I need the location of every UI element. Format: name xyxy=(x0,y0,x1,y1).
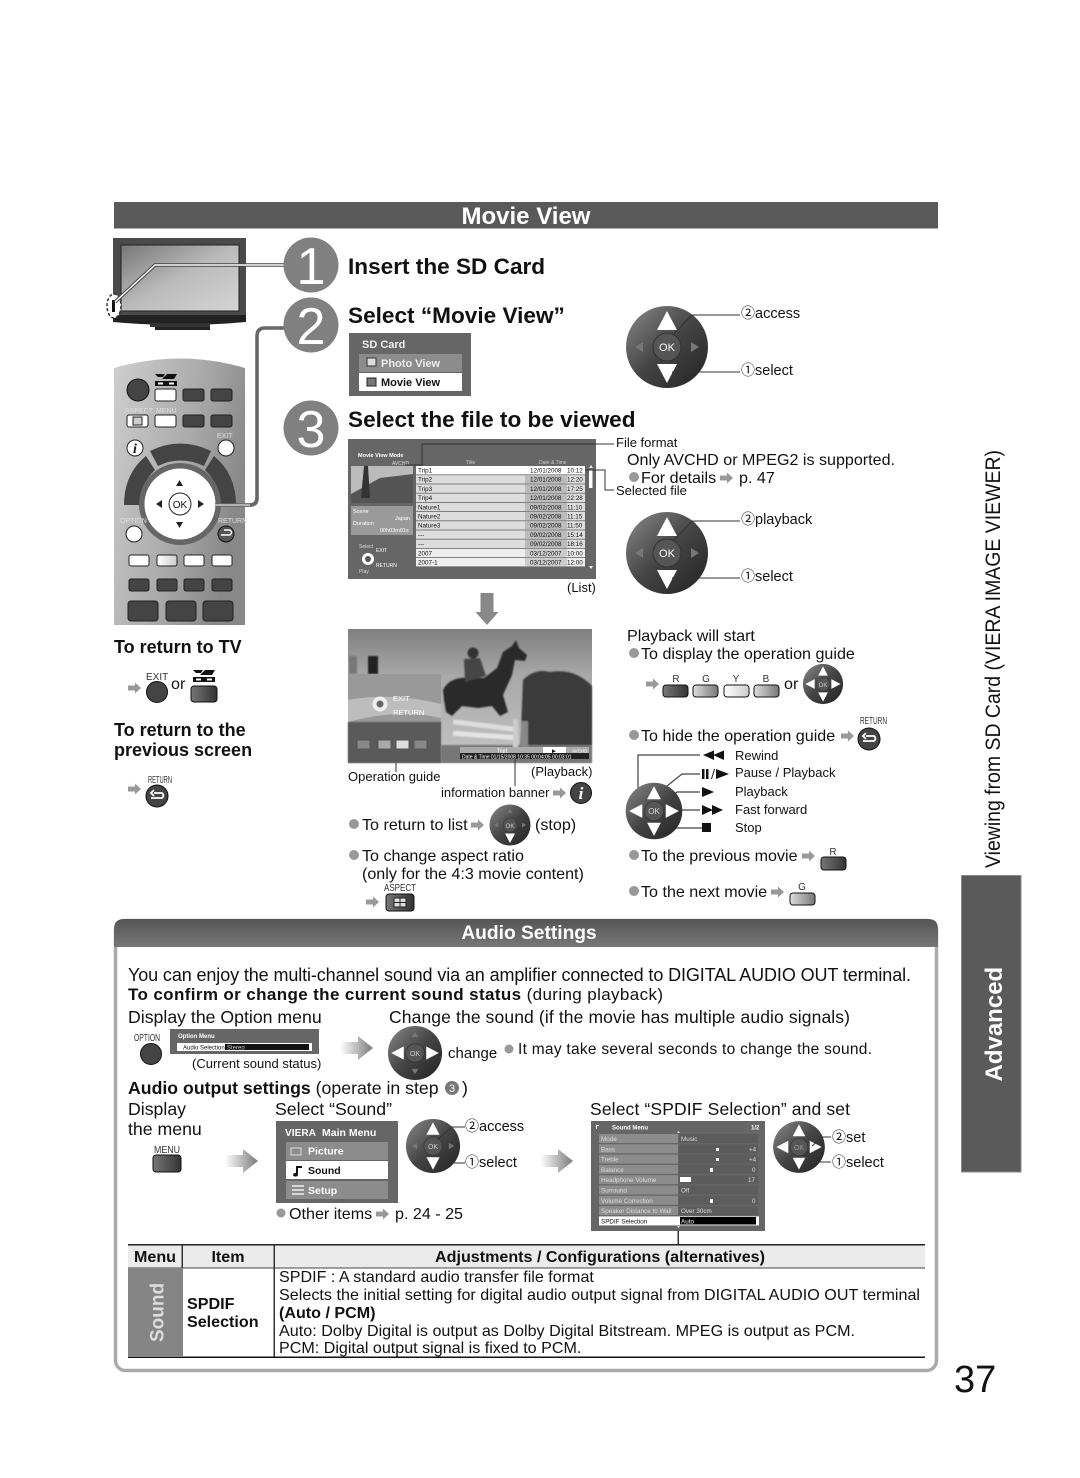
nav pad: access and select xyxy=(406,1118,524,1173)
playback control legend: OK xyxy=(648,807,660,816)
settings table xyxy=(128,1244,925,1358)
text: playback will start: Playback will start xyxy=(627,627,755,645)
option menu screen: Option Menu xyxy=(178,1034,215,1040)
table header: Item xyxy=(211,1248,245,1266)
table header xyxy=(128,1244,925,1357)
instruction: aspect ratio: ASPECT xyxy=(384,883,416,894)
sound menu screen: Off xyxy=(681,1188,690,1194)
file list table: 03/12/2007 xyxy=(530,560,562,566)
screen: playback photo of horse and rider xyxy=(348,629,592,763)
step: display the menu: Display xyxy=(128,1099,186,1119)
list control hints xyxy=(359,544,397,575)
buttons: colour keys or pad xyxy=(646,664,843,704)
main menu screen: VIERA xyxy=(285,1128,316,1139)
SD Card menu panel: SD Card xyxy=(362,339,405,351)
list control hints: EXIT xyxy=(376,548,387,554)
screen: Movie View Mode list: AVCHD xyxy=(392,461,410,467)
option menu screen: (Current sound status) xyxy=(192,1056,321,1071)
step 1 heading xyxy=(284,238,545,296)
playback control legend xyxy=(626,748,836,839)
sound menu screen: 17 xyxy=(748,1177,756,1184)
file list table: --- xyxy=(418,532,424,539)
file list table: 18:16 xyxy=(567,541,583,548)
remote control: RETURN xyxy=(218,518,247,525)
instruction: previous movie xyxy=(629,847,846,870)
sound menu screen: Volume Correction xyxy=(601,1198,653,1205)
instruction: EXIT or SD button: EXIT xyxy=(146,672,168,683)
caption: Operation guide: Operation guide xyxy=(348,769,441,784)
sound menu screen: Treble xyxy=(601,1157,619,1164)
main menu screen xyxy=(276,1121,398,1203)
playback control legend: Fast forward xyxy=(735,802,807,817)
file list table: Nature2 xyxy=(418,514,441,520)
step: display the menu: the menu xyxy=(128,1119,202,1139)
heading: Audio output settings: Audio output settings (operate in step xyxy=(128,1078,439,1098)
file list table: Trip3 xyxy=(418,486,433,493)
instruction: EXIT or SD button xyxy=(128,670,217,702)
remote control xyxy=(114,358,247,625)
step: change the sound: It may take several seconds to change the sound. xyxy=(518,1041,872,1058)
step: change the sound: Change the sound (if the movie has multiple audio signals) xyxy=(389,1007,850,1027)
sound menu screen: Sound Menu xyxy=(612,1126,648,1132)
instruction: RETURN button xyxy=(128,775,172,807)
audio settings header: Audio Settings xyxy=(461,923,597,944)
sound menu screen: Speaker Distance to Wall xyxy=(601,1208,671,1215)
file list table: 12/01/2008 xyxy=(530,495,562,502)
nav pad: access and select: OK xyxy=(659,342,676,354)
nav pad: playback and select: playback xyxy=(755,512,813,528)
screen: Movie View Mode list: Movie View Mode xyxy=(358,453,403,459)
table description: PCM: Digital output signal is fixed to PCM. xyxy=(279,1339,581,1357)
SD Card menu panel: Movie View xyxy=(381,377,441,389)
nav pad: access and select: access xyxy=(755,306,800,322)
step: display option menu: OPTION xyxy=(134,1033,160,1044)
file list table: 12/01/2008 xyxy=(530,477,562,484)
buttons: colour keys or pad: R xyxy=(672,674,680,685)
note: supported formats: p. 47 xyxy=(739,469,775,487)
title bar: Movie View xyxy=(114,202,938,230)
file list table: 10:12 xyxy=(567,468,583,474)
heading: To return to the previous screen: To return to the xyxy=(114,720,246,740)
caption: information banner xyxy=(441,759,592,804)
sound menu screen: 0 xyxy=(752,1198,756,1205)
sound menu screen: Balance xyxy=(601,1167,624,1174)
instruction: next movie: G xyxy=(798,882,806,893)
remote control: MENU xyxy=(156,408,177,415)
option menu screen: Stereo xyxy=(227,1046,245,1052)
file list table: Trip1 xyxy=(418,468,433,474)
information banner: Trip1 xyxy=(497,748,508,754)
list scene info: 00h03m01s xyxy=(380,528,409,534)
file list table: 12/01/2008 xyxy=(530,486,562,493)
nav pad: access and select: ② xyxy=(741,305,755,321)
sound menu screen: Headphone Volume xyxy=(601,1177,657,1184)
file list table: 12/01/2008 xyxy=(530,468,562,474)
playback control legend: Playback xyxy=(735,784,788,799)
screen: Movie View Mode list: Date & Time xyxy=(539,460,567,466)
side tab: Advanced xyxy=(962,876,1021,1172)
file list table: 09/02/2008 xyxy=(530,523,562,530)
page number: 37 xyxy=(954,1359,996,1401)
file list table: 2007 xyxy=(418,550,433,557)
step: display the menu: MENU xyxy=(154,1145,180,1156)
operation guide overlay: EXIT xyxy=(393,694,410,703)
connector over remote to OK pad xyxy=(215,498,257,505)
intro text xyxy=(128,965,911,1004)
arrow xyxy=(340,1036,373,1060)
heading: To return to the previous screen xyxy=(114,720,252,760)
table description: Selects the initial setting for digital audio output signal from DIGITAL AUDIO OUT terminal xyxy=(279,1286,920,1304)
step 2 heading xyxy=(284,298,565,356)
information banner: AVCHD xyxy=(572,748,588,754)
step 3 heading: 3 xyxy=(297,401,325,459)
list control hints: RETURN xyxy=(376,563,397,569)
information banner xyxy=(460,747,589,760)
option menu screen xyxy=(170,1029,321,1071)
note: supported formats: Only AVCHD or MPEG2 is supported. xyxy=(627,451,895,469)
information banner: Date & Time 01/15/2008 10:35 00:04:05 00:03:01 xyxy=(462,754,572,760)
nav pad: playback and select xyxy=(626,511,813,594)
file list table: 03/12/2007 xyxy=(530,550,562,557)
note: other items xyxy=(276,1205,463,1223)
text: playback will start: To display the operation guide xyxy=(641,645,855,663)
nav pad: access and select: access xyxy=(479,1119,524,1135)
buttons: colour keys or pad: B xyxy=(763,674,770,685)
instruction: hide operation guide xyxy=(629,716,887,750)
main menu screen: Sound xyxy=(308,1165,341,1177)
nav pad: set and select: ① xyxy=(832,1154,846,1170)
screen: Movie View Mode list xyxy=(348,439,596,579)
arrow xyxy=(540,1149,573,1173)
table item: SPDIF Selection: SPDIF xyxy=(187,1295,235,1313)
file list table xyxy=(416,466,585,566)
sound menu screen: Mode xyxy=(601,1136,617,1143)
file list table: 12:20 xyxy=(567,477,583,484)
sound menu screen: +4 xyxy=(749,1146,757,1153)
note: supported formats: For details xyxy=(641,469,716,487)
list scene info: Duration xyxy=(353,521,374,527)
nav pad: set and select xyxy=(773,1121,884,1173)
nav pad: set and select: OK xyxy=(794,1145,804,1152)
heading: To return to TV: To return to TV xyxy=(114,637,242,657)
list scene info xyxy=(351,506,413,535)
heading: To return to the previous screen: previous screen xyxy=(114,740,252,760)
note: supported formats xyxy=(627,451,895,487)
step: select Sound: Select “Sound” xyxy=(275,1099,392,1119)
step: change the sound: change xyxy=(448,1045,497,1062)
instruction: aspect ratio: To change aspect ratio xyxy=(362,847,524,865)
table description: SPDIF : A standard audio transfer file format xyxy=(279,1268,594,1286)
file list table: --- xyxy=(418,541,424,548)
list thumbnail xyxy=(351,466,413,503)
instruction: hide operation guide: RETURN xyxy=(860,716,887,727)
instruction: return to list: To return to list xyxy=(362,816,468,834)
step 1 heading: Insert the SD Card xyxy=(348,254,545,279)
nav pad: access and select xyxy=(626,305,800,388)
sound menu screen: Bass xyxy=(601,1146,615,1153)
step: change the sound: OK xyxy=(410,1051,420,1058)
main menu screen: Main Menu xyxy=(322,1127,376,1139)
step 3 heading xyxy=(284,400,636,459)
file list table: Trip4 xyxy=(418,495,433,502)
sound menu screen: 1/2 xyxy=(751,1126,760,1132)
buttons: colour keys or pad: OK xyxy=(819,683,827,689)
SD Card menu panel: Photo View xyxy=(381,358,441,370)
sound menu screen: Music xyxy=(681,1136,697,1143)
step: display option menu: Display the Option menu xyxy=(128,1007,322,1027)
nav pad: playback and select: OK xyxy=(659,548,676,560)
information banner: ▶ xyxy=(552,748,556,754)
sound menu screen: Auto xyxy=(681,1218,694,1225)
side label: Viewing from SD Card: Viewing from SD Card (VIERA IMAGE VIEWER) xyxy=(982,450,1005,868)
file list table: 12:00 xyxy=(567,560,583,566)
table header: Menu xyxy=(134,1248,176,1266)
callout: Selected file xyxy=(585,470,687,498)
nav pad: playback and select: ① xyxy=(741,568,755,584)
callout: Selected file: Selected file xyxy=(616,483,687,498)
sound menu screen xyxy=(591,1121,765,1231)
remote control: OPTION xyxy=(120,518,147,525)
callout: File format: File format xyxy=(616,435,678,450)
option menu screen: Audio Selection xyxy=(183,1046,225,1052)
step: select SPDIF: Select “SPDIF Selection” and set xyxy=(590,1099,850,1119)
instruction: return to list xyxy=(349,804,576,846)
sound menu screen: SPDIF Selection xyxy=(601,1218,648,1225)
file list table: 15:14 xyxy=(567,532,583,539)
instruction: previous movie: To the previous movie xyxy=(641,847,798,865)
list scrollbar xyxy=(589,465,593,569)
main menu screen: Setup xyxy=(308,1185,337,1197)
file list table: Nature1 xyxy=(418,504,441,511)
file list table: 09/02/2008 xyxy=(530,541,562,548)
sound menu screen: Over 30cm xyxy=(681,1208,712,1215)
instruction: aspect ratio xyxy=(349,847,584,911)
buttons: colour keys or pad: G xyxy=(702,674,710,685)
intro text: You can enjoy the multi-channel sound via an amplifier connected to DIGITAL AUDIO OUT terminal. xyxy=(128,965,911,985)
step 2 heading: 2 xyxy=(297,298,325,356)
file list table: 11:50 xyxy=(567,523,583,530)
nav pad: set and select: ② xyxy=(832,1129,846,1145)
nav pad: access and select: ① xyxy=(465,1154,479,1170)
table header: Adjustments / Configurations (alternatives) xyxy=(435,1248,765,1266)
step 1 heading: 1 xyxy=(297,238,325,296)
table side tab: Sound xyxy=(128,1268,183,1356)
file list table: 2007-1 xyxy=(418,560,438,566)
main menu screen: Picture xyxy=(308,1146,344,1158)
file list table: 17:25 xyxy=(567,486,583,493)
instruction: hide operation guide: To hide the operation guide xyxy=(641,727,835,745)
nav pad: access and select: select xyxy=(755,363,793,379)
screen: Movie View Mode list: Title xyxy=(466,460,475,466)
caption: information banner: information banner xyxy=(441,785,550,800)
intro text: To confirm or change the current sound status (during playback) xyxy=(128,985,663,1004)
arrow: down from list to playback xyxy=(476,593,498,625)
step 3 heading: Select the file to be viewed xyxy=(348,407,636,432)
instruction: aspect ratio: (only for the 4:3 movie content) xyxy=(362,865,584,883)
table description xyxy=(279,1268,920,1357)
connector: sound menu to table xyxy=(678,1231,679,1245)
operation guide overlay xyxy=(348,674,441,763)
heading: Audio output settings: 3 xyxy=(449,1083,455,1095)
nav pad: set and select: set xyxy=(846,1130,865,1146)
remote control: EXIT xyxy=(217,433,233,440)
step: display option menu xyxy=(128,1007,322,1064)
step 2 heading: Select “Movie View” xyxy=(348,303,565,328)
table item: SPDIF Selection: Selection xyxy=(187,1313,259,1331)
instruction: next movie xyxy=(629,882,815,905)
nav pad: access and select: ② xyxy=(465,1118,479,1134)
connector: step 2 to remote control xyxy=(215,328,290,505)
instruction: RETURN button: RETURN xyxy=(148,775,172,786)
file list table: 22:28 xyxy=(567,495,583,502)
playback control legend: Pause / Playback xyxy=(735,765,836,780)
file list table: 11:10 xyxy=(567,504,583,511)
note: other items: p. 24 - 25 xyxy=(395,1205,463,1223)
nav pad: access and select: OK xyxy=(428,1144,438,1151)
caption: List: (List) xyxy=(567,580,596,595)
list scene info: Japan xyxy=(395,516,410,522)
step: display the menu xyxy=(128,1099,202,1172)
remote control: i xyxy=(133,442,137,457)
buttons: colour keys or pad: Y xyxy=(733,674,740,685)
callout: File format xyxy=(405,435,678,465)
title bar: Movie View: Movie View xyxy=(462,203,591,230)
file list table: 09/02/2008 xyxy=(530,532,562,539)
caption: information banner: i xyxy=(579,784,584,803)
arrow xyxy=(225,1149,258,1173)
table side tab: Sound: Sound xyxy=(148,1283,168,1342)
side tab: Advanced: Advanced xyxy=(981,967,1008,1082)
list control hints: Play xyxy=(359,569,369,575)
nav pad: playback and select: select xyxy=(755,569,793,585)
instruction: previous movie: R xyxy=(829,847,837,858)
sound menu screen: +4 xyxy=(749,1157,757,1164)
nav pad: access and select: ① xyxy=(741,362,755,378)
operation guide overlay: RETURN xyxy=(393,708,424,717)
sound menu screen: Surround xyxy=(601,1188,627,1194)
list control hints: Select xyxy=(359,544,374,550)
step: change the sound xyxy=(388,1007,872,1080)
remote control: ASPECT xyxy=(125,408,154,415)
sound menu screen: 0 xyxy=(752,1167,756,1174)
table item: SPDIF Selection xyxy=(187,1295,259,1331)
nav pad: set and select: select xyxy=(846,1155,884,1171)
list scene info: Scene xyxy=(353,509,369,515)
remote control: OK xyxy=(173,500,188,511)
playback control legend: Stop xyxy=(735,820,762,835)
file list table: 09/02/2008 xyxy=(530,504,562,511)
buttons: colour keys or pad: or xyxy=(784,675,799,693)
file list table: 09/02/2008 xyxy=(530,514,562,520)
file list table: Nature3 xyxy=(418,523,441,530)
table description: (Auto / PCM) xyxy=(279,1304,376,1322)
file list table: Trip2 xyxy=(418,477,433,484)
audio settings header xyxy=(114,919,938,947)
panel: Audio Settings xyxy=(114,919,938,1370)
caption: Playback: (Playback) xyxy=(531,764,592,779)
nav pad: access and select: select xyxy=(479,1155,517,1171)
playback control legend: Rewind xyxy=(735,748,778,763)
connector: step 1 to SD slot xyxy=(115,265,290,302)
heading: Audio output settings: ) xyxy=(462,1078,468,1098)
instruction: return to list: OK xyxy=(506,824,514,830)
instruction: next movie: To the next movie xyxy=(641,883,767,901)
SD Card menu panel xyxy=(349,333,471,396)
file list table: 11:15 xyxy=(567,514,583,520)
instruction: EXIT or SD button: or xyxy=(171,675,186,693)
nav pad: playback and select: ② xyxy=(741,511,755,527)
file list table: 10:00 xyxy=(567,550,583,557)
text: playback will start xyxy=(627,627,855,663)
instruction: return to list: (stop) xyxy=(535,816,576,834)
illustration: television xyxy=(107,238,246,330)
note: other items: Other items xyxy=(289,1205,372,1223)
table description: Auto: Dolby Digital is output as Dolby Digital Bitstream. MPEG is output as PCM. xyxy=(279,1322,855,1340)
